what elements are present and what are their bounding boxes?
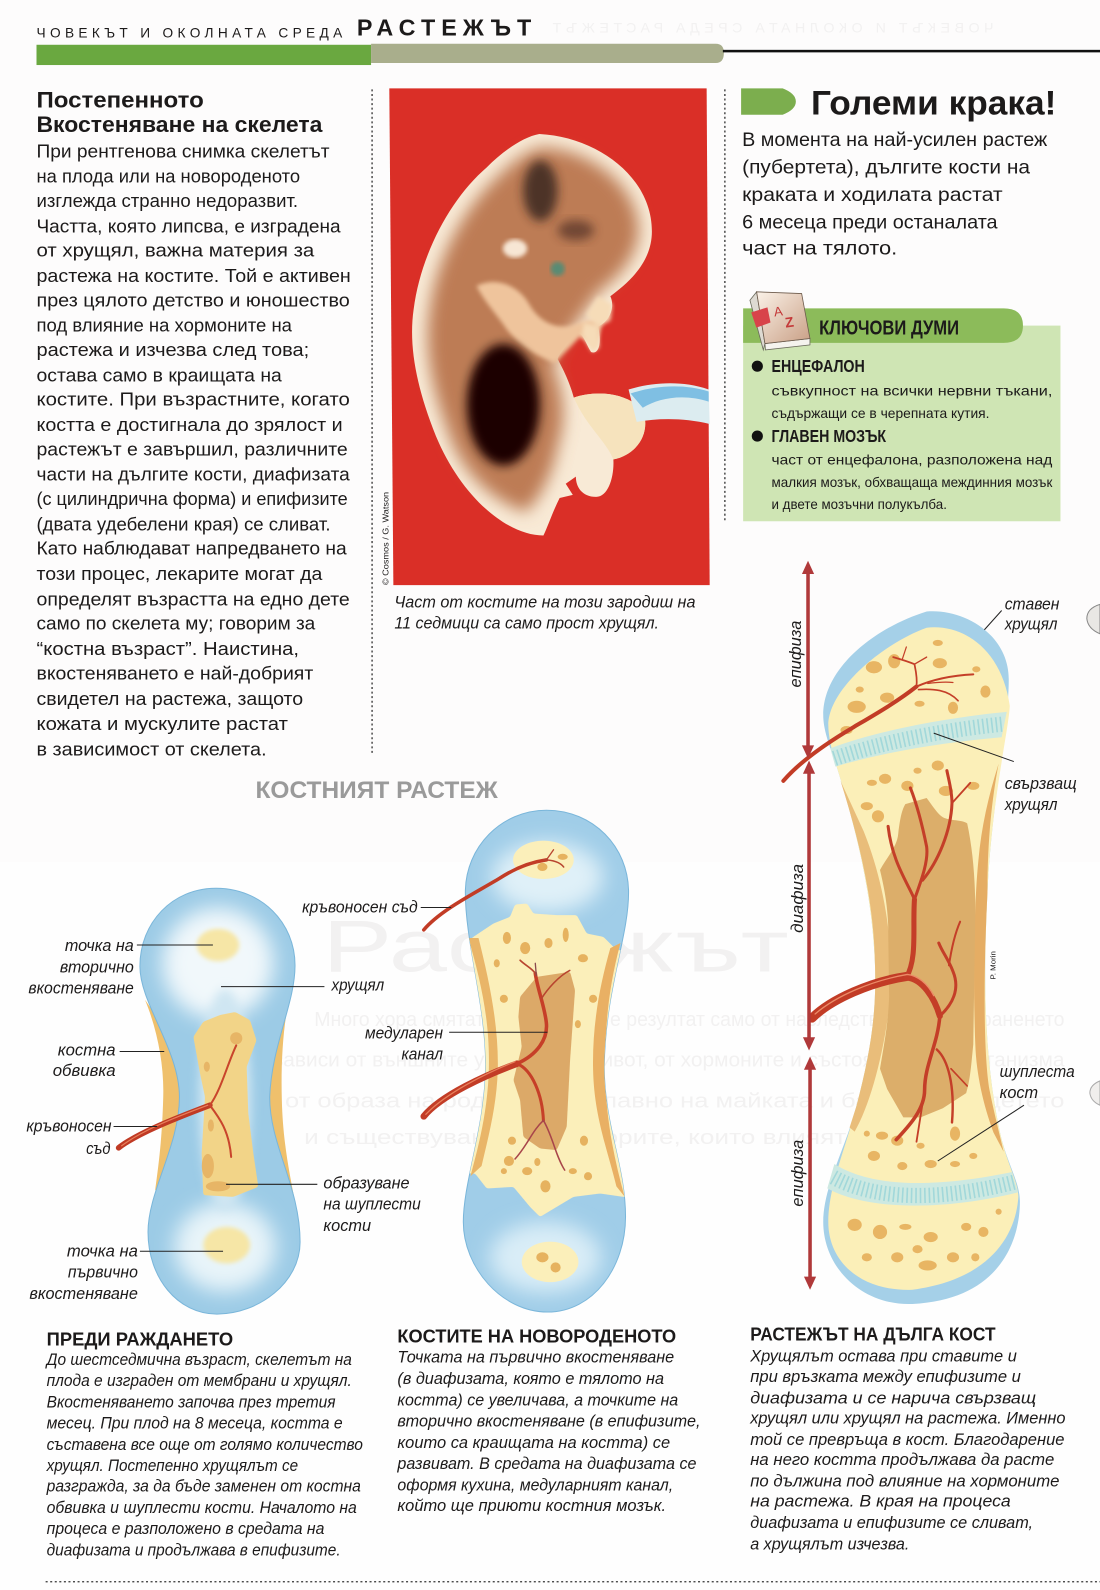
label: articular cartilage: ставен <box>1005 595 1060 613</box>
paragraph: Вкостеняването започва през третия <box>47 1393 336 1411</box>
body text <box>742 130 1047 260</box>
article body text: свидетел на растежа, защото <box>36 688 303 709</box>
label: secondary ossification point: вторично <box>60 958 134 976</box>
paragraph: които са краищата на костта) се <box>397 1434 670 1452</box>
panel: key words <box>743 292 1060 521</box>
paragraph: при връзката между епифизите и <box>750 1368 1021 1386</box>
paragraph: на растежа. В края на процеса <box>750 1493 1011 1511</box>
body text: 6 месеца преди останалата <box>742 212 998 233</box>
panel: gradual ossification article <box>36 88 351 759</box>
paragraph: той се превръща в кост. Благодарение <box>750 1431 1065 1449</box>
subheading: РАСТЕЖЪТ НА ДЪЛГА КОСТ <box>750 1323 996 1344</box>
section label: ЧОВЕКЪТ И ОКОЛНАТА СРЕДА <box>36 26 345 41</box>
term: encephalon: съдържащи се в черепната кутия. <box>772 406 989 422</box>
growth cartilage bands <box>827 712 1018 1206</box>
paragraph: на него костта продължава да расте <box>750 1451 1054 1469</box>
label: connecting cartilage: свързващ <box>1005 775 1077 793</box>
label: connecting cartilage <box>1004 775 1077 814</box>
paragraph: който ще приюти костния мозък. <box>397 1497 666 1515</box>
label: secondary ossification point: точка на <box>65 937 134 955</box>
bone collars <box>468 938 498 1176</box>
label: blood vessel: кръвоносен съд <box>302 899 418 917</box>
bone collar <box>145 997 296 1207</box>
cartilage body <box>463 810 629 1312</box>
paragraph: съставена все още от голямо количество <box>47 1436 363 1454</box>
label: primary ossification point: вкостеняване <box>29 1285 138 1303</box>
diagram: newborn bone <box>302 810 634 1312</box>
label: primary ossification point: точка на <box>67 1242 138 1260</box>
spongy bone body <box>828 627 1018 1290</box>
ossification zone <box>193 1012 258 1197</box>
arrow: lower epiphysis <box>804 1057 816 1290</box>
term: encephalon: съвкупност на всички нервни тъкани, <box>772 384 1052 400</box>
secondary ossification point <box>197 929 239 961</box>
article body text: растежът е завършил, различните <box>36 438 348 459</box>
label: cartilage: хрущял <box>331 977 384 995</box>
photo caption: Част от костите на този зародиш на <box>394 593 695 611</box>
photo caption: 11 седмици са само прост хрущял. <box>394 615 659 633</box>
icon: dictionary book: A <box>773 303 784 319</box>
label: blood vessel: съд <box>86 1140 111 1158</box>
label: medullary canal: медуларен <box>365 1024 443 1042</box>
subheading: ПРЕДИ РАЖДАНЕТО <box>47 1329 233 1350</box>
article body text: този процес, лекарите могат да <box>36 563 323 584</box>
text: и от образа на родителите, главно на майката и бащата при детето <box>264 1090 1065 1112</box>
paragraph: а хрущялът изчезва. <box>750 1535 909 1553</box>
text: Растежът <box>322 906 789 987</box>
arrow: diaphysis <box>803 761 815 1050</box>
photo caption <box>394 593 695 633</box>
body text: (пубертета), дългите кости на <box>742 158 1030 179</box>
article body text: При рентгенова снимка скелетът <box>36 140 330 161</box>
main blood vessel <box>424 960 570 1170</box>
text block: before birth <box>45 1329 363 1559</box>
top blood vessel <box>424 850 564 930</box>
article body text: костта е достигнала до зрялост и <box>36 414 343 435</box>
subheading: КОСТИТЕ НА НОВОРОДЕНОТО <box>397 1325 676 1346</box>
panel: big feet <box>741 85 1056 260</box>
text: и съществуване на факторите, които влияят пряко <box>304 1127 923 1149</box>
epiphysis blood vessel <box>783 647 973 781</box>
article body text: вкостеняването е най-добрият <box>36 662 314 683</box>
label: blood vessel: кръвоносен <box>26 1118 112 1136</box>
paragraph: месец. При плод на 8 месеца, костта е <box>47 1415 343 1433</box>
leader lines <box>114 945 324 1251</box>
text block: newborn bones <box>396 1325 701 1515</box>
paragraph: До шестседмична възраст, скелетът на <box>45 1351 352 1369</box>
article body text: “костна възраст”. Наистина, <box>36 638 299 659</box>
embryo figure <box>412 134 652 535</box>
paragraph: по дължина под влияние на хормоните <box>750 1472 1059 1490</box>
paragraph: диафизата и епифизите се сливат, <box>750 1514 1033 1532</box>
article body text: под влияние на хормоните на <box>36 315 293 336</box>
label: primary ossification point: първично <box>68 1264 138 1282</box>
label: bone sheath: обвивка <box>53 1062 116 1080</box>
cartilage body <box>140 888 300 1314</box>
term: brain: ГЛАВЕН МОЗЪК <box>772 426 886 446</box>
text block: growth of a long bone <box>749 1323 1066 1553</box>
main blood vessel <box>812 771 970 1142</box>
medullary canal <box>513 972 575 1150</box>
paragraph: вторично вкостеняване (в епифизите, <box>397 1413 701 1431</box>
label: bone sheath: костна <box>58 1042 116 1060</box>
paragraph: диафизата и се нарича свързващ <box>750 1389 1036 1407</box>
article body text <box>36 140 351 759</box>
label: spongy bone formation: на шуплести <box>323 1196 421 1214</box>
paragraph: оформя кухина, медуларният канал, <box>397 1476 673 1494</box>
spongy bone zone <box>470 904 624 1216</box>
label: epiphysis bottom: епифиза <box>789 1140 807 1207</box>
page title: РАСТЕЖЪТ <box>357 15 531 41</box>
photo credit: © Cosmos / G. Watson <box>381 492 390 585</box>
text: Много хора смятат, че растежът е резултат само от наследствеността и храненето <box>314 1009 1065 1031</box>
article body text: кожата и мускулите растат <box>36 713 288 734</box>
medullary canal <box>880 798 975 1117</box>
article body text: определят възрастта на едно дете <box>36 588 350 609</box>
icon: dictionary book: Z <box>784 314 795 332</box>
primary ossification point <box>203 1227 250 1263</box>
leader lines <box>421 908 547 1032</box>
label: secondary ossification point <box>28 937 134 998</box>
green marker <box>741 88 796 115</box>
paragraph: Точката на първично вкостеняване <box>397 1349 674 1367</box>
label: spongy bone formation: кости <box>323 1217 371 1235</box>
label: spongy bone: шуплеста <box>1000 1063 1075 1081</box>
paragraph: развиват. В средата на диафизата се <box>396 1455 696 1473</box>
article body text: костите. При възрастните, когато <box>36 389 350 410</box>
label: spongy bone formation <box>323 1174 421 1235</box>
term: encephalon <box>752 356 1052 422</box>
article body text: само по скелета му; говорим за <box>36 613 316 634</box>
label: diaphysis: диафиза <box>789 864 807 933</box>
text: зависи от външните условия на живот, от хормоните и състоянието на организма <box>274 1050 1065 1072</box>
article body text: остава само в краищата на <box>36 364 282 385</box>
paragraph: Хрущялът остава при ставите и <box>749 1348 1017 1366</box>
paragraph <box>45 1351 363 1559</box>
paragraph: хрущял или хрущял на растежа. Именно <box>749 1410 1066 1428</box>
label: medullary canal <box>365 1024 443 1064</box>
term: brain: и двете мозъчни полукълба. <box>772 497 947 513</box>
key words header bar <box>743 308 1023 343</box>
paragraph <box>396 1349 701 1515</box>
label: articular cartilage <box>1004 595 1060 634</box>
label: secondary ossification point: вкостеняване <box>28 980 134 998</box>
article body text: изглежда странно недоразвит. <box>36 190 298 211</box>
header bar <box>36 44 1100 65</box>
diagram: bone before birth <box>26 888 421 1314</box>
paragraph: костта) се увеличава, а точките на <box>397 1391 678 1409</box>
article body text: от хрущял, важна материя за <box>36 240 315 261</box>
article body text: (с цилиндрична форма) и епифизите <box>36 488 348 509</box>
diagram: growth of a long bone <box>783 561 1077 1304</box>
paragraph: хрущял. Постепенно хрущялът се <box>46 1457 298 1475</box>
article heading <box>36 88 323 137</box>
label: articular cartilage: хрущял <box>1004 616 1057 634</box>
term: encephalon: ЕНЦЕФАЛОН <box>772 356 865 376</box>
paragraph: обвивка и шуплести кости. Началото на <box>47 1499 357 1517</box>
articular cartilage shell <box>823 611 1020 1304</box>
paragraph <box>749 1348 1066 1553</box>
spongy bone cavities <box>840 640 1002 1270</box>
text: ЧОВЕКЪТ И ОКОЛНАТА СРЕДА РАСТЕЖЪТ <box>547 21 994 37</box>
paragraph: процеса е разположено в средата на <box>47 1520 324 1538</box>
term: brain <box>752 426 1053 513</box>
article body text: в зависимост от скелета. <box>36 738 267 759</box>
leader lines <box>934 610 1024 1161</box>
label: connecting cartilage: хрущял <box>1004 796 1057 814</box>
article body text: Частта, която липсва, е изградена <box>36 215 341 236</box>
paragraph: (в диафизата, която е тялото на <box>397 1370 664 1388</box>
article body text: (двата удебелени края) се сливат. <box>36 513 331 534</box>
body text: част на тялото. <box>742 239 897 260</box>
article heading: Вкостеняване на скелета <box>36 112 323 137</box>
article heading: Постепенното <box>36 88 204 113</box>
article body text: през цялото детство и юношество <box>36 289 350 310</box>
illustrator credit: P. Morin <box>990 951 998 980</box>
term: brain: малкия мозък, обхващаща междинния мозък <box>772 475 1053 491</box>
umbilical cord <box>629 383 710 424</box>
blood vessel <box>119 1045 236 1157</box>
icon: dictionary book <box>750 292 810 350</box>
label: blood vessel <box>26 1118 112 1158</box>
label: spongy bone <box>1000 1063 1075 1102</box>
label: primary ossification point <box>29 1242 138 1303</box>
header: section and page title <box>36 15 1100 65</box>
arrow: upper epiphysis <box>802 561 814 759</box>
heading: Големи крака! <box>811 85 1056 123</box>
ossification points <box>513 841 574 879</box>
key words heading: КЛЮЧОВИ ДУМИ <box>819 318 959 340</box>
label: medullary canal: канал <box>401 1046 443 1064</box>
label: spongy bone: кост <box>1000 1084 1038 1102</box>
body text: краката и ходилата растат <box>742 185 1003 206</box>
heading: bone growth: КОСТНИЯТ РАСТЕЖ <box>255 777 499 804</box>
label: epiphysis top: епифиза <box>787 621 805 688</box>
paragraph: диафизата и продължава в епифизите. <box>47 1541 341 1559</box>
term: brain: част от енцефалона, разположена над <box>772 452 1053 468</box>
paragraph: разгражда, за да бъде заменен от костна <box>46 1477 361 1495</box>
article body text: растежа и изчезва след това; <box>36 339 309 360</box>
bone collars <box>840 781 891 1132</box>
article body text: части на дългите кости, диафизата <box>36 464 350 485</box>
label: bone sheath <box>53 1042 116 1080</box>
paragraph: плода е изграден от мембрани и хрущял. <box>47 1372 352 1390</box>
article body text: растежа на костите. Той е активен <box>36 265 351 286</box>
article body text: Като наблюдават напредването на <box>36 538 347 559</box>
body text: В момента на най-усилен растеж <box>742 130 1047 151</box>
photo: 11-week embryo on red background <box>381 88 710 633</box>
label: spongy bone formation: образуване <box>323 1174 410 1192</box>
article body text: на плода или на новороденото <box>36 166 300 187</box>
